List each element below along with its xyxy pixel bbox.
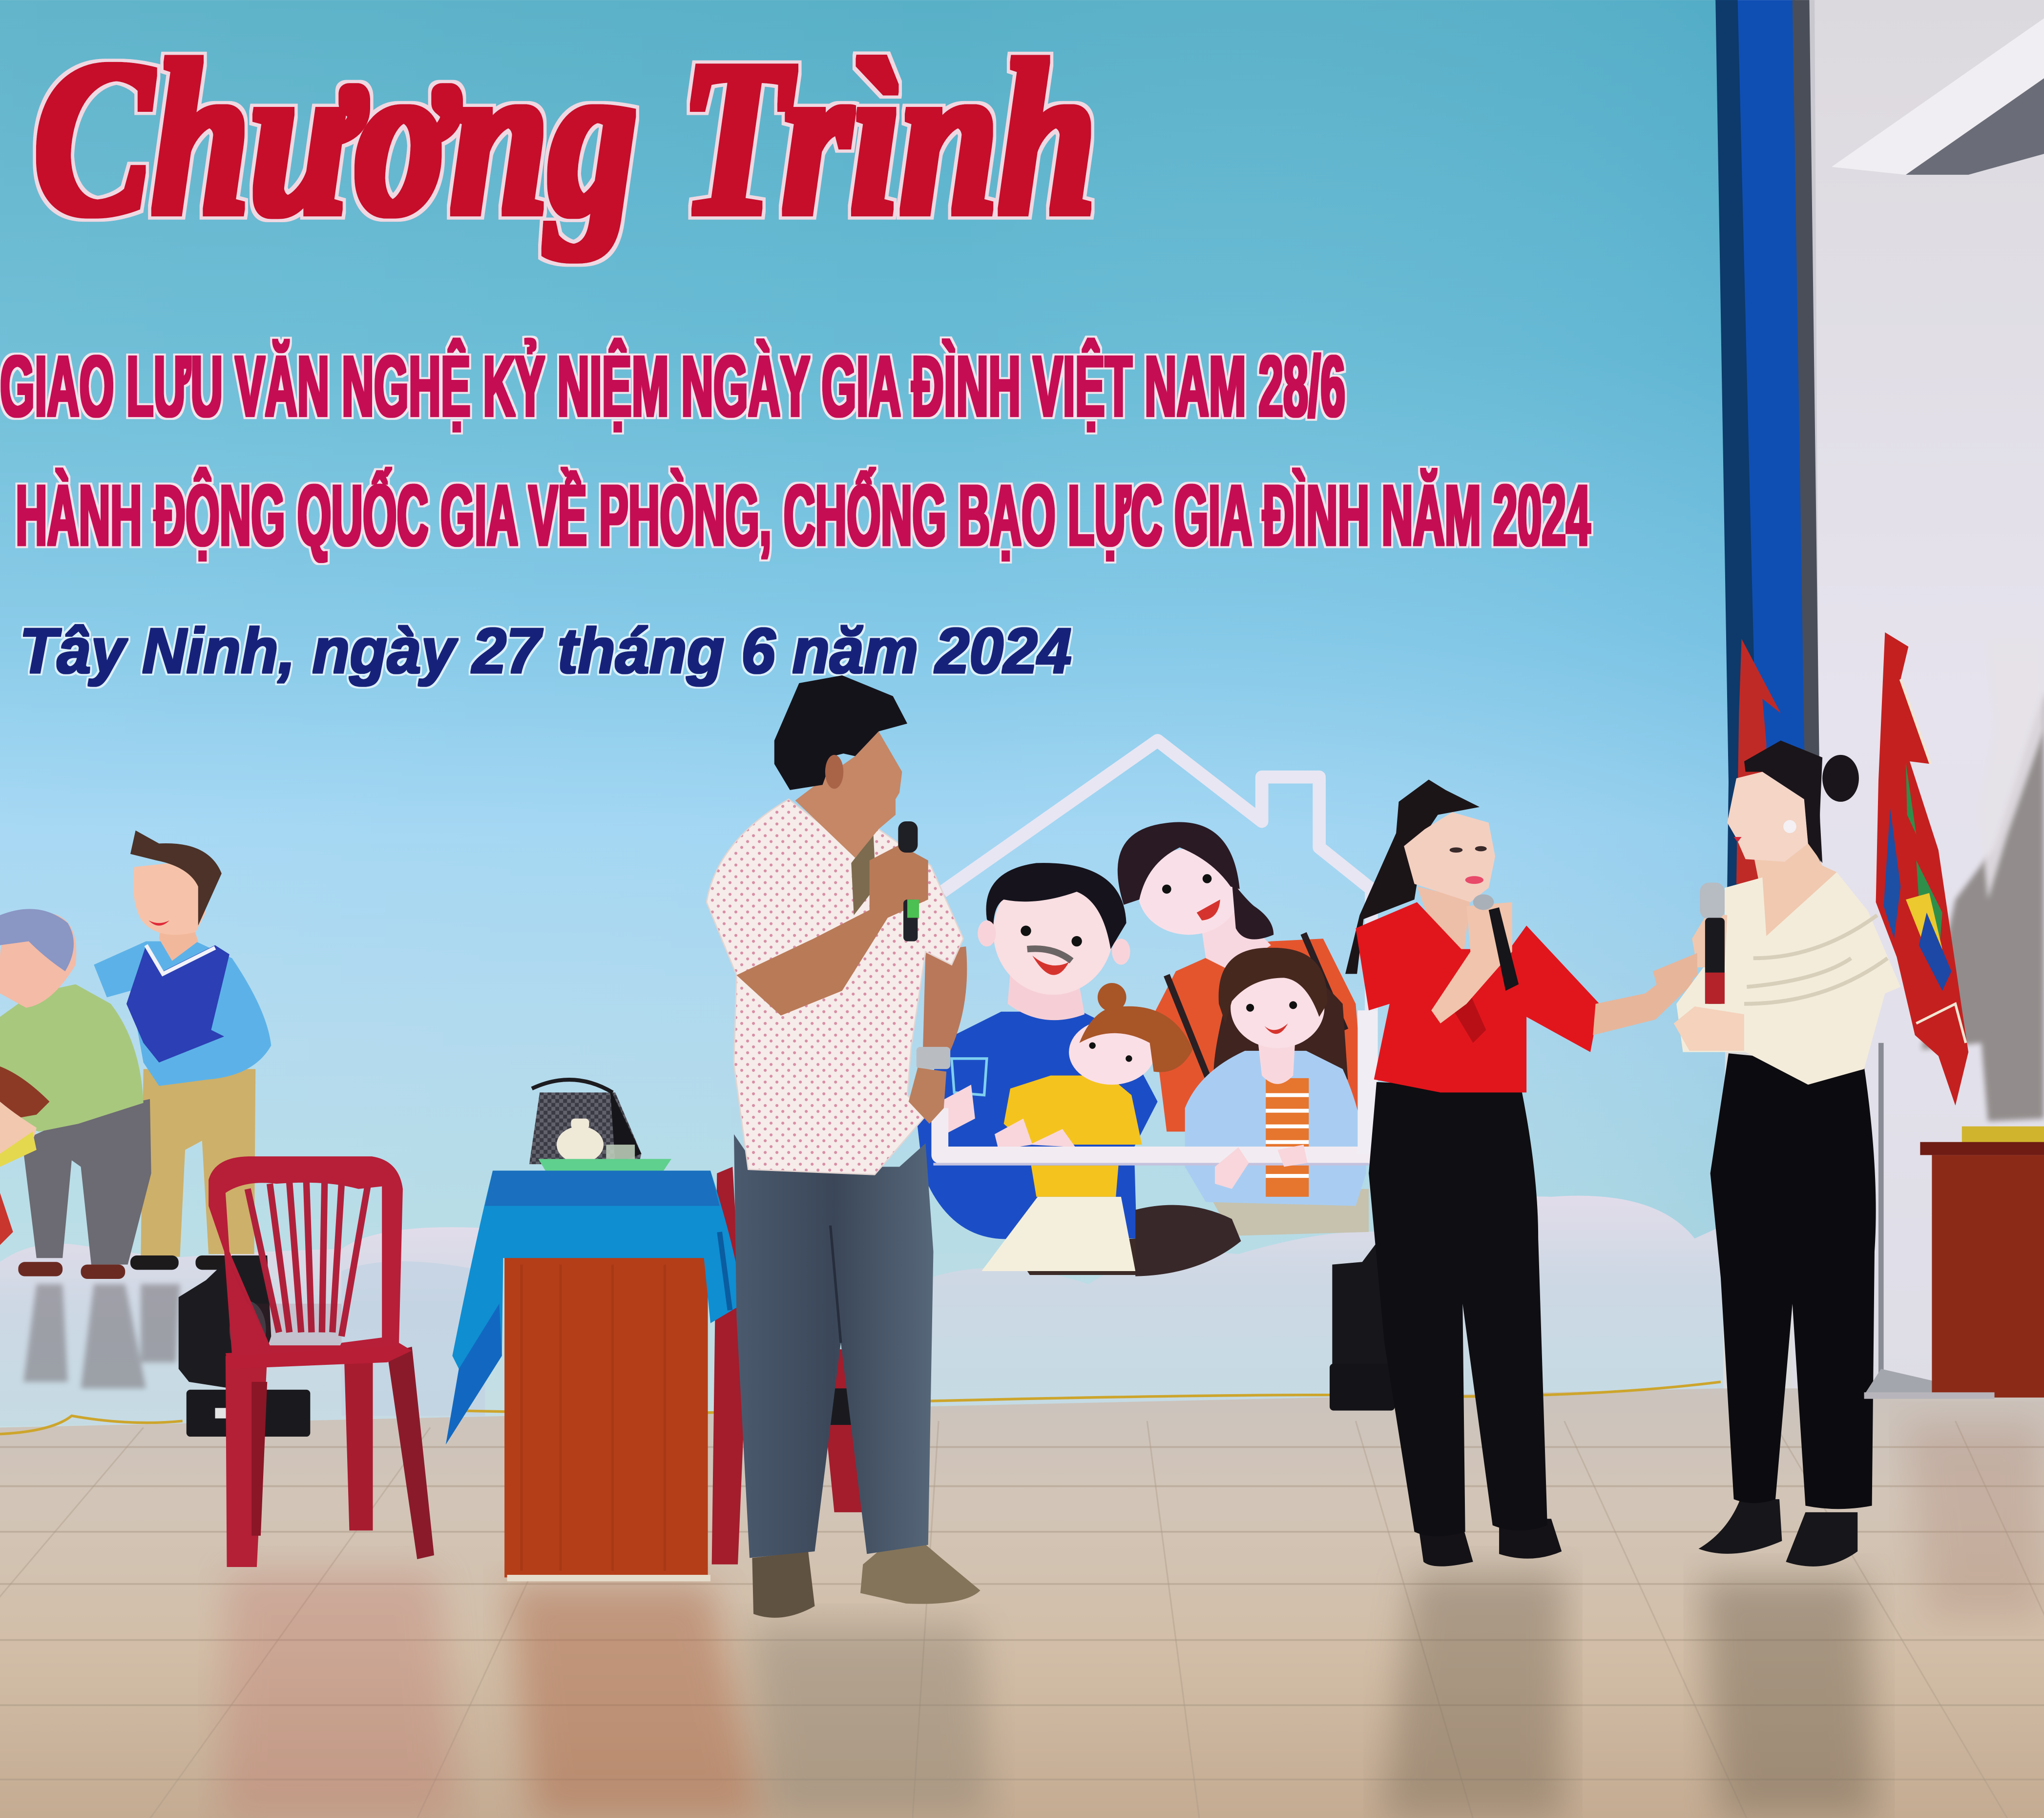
hair ponytail xyxy=(1345,780,1480,974)
trousers xyxy=(1369,1082,1547,1536)
face xyxy=(1727,772,1808,862)
yellow cable xyxy=(0,1382,1721,1434)
little girl xyxy=(981,983,1193,1271)
man hand at hip xyxy=(909,1068,946,1124)
red woman's mic xyxy=(1473,894,1519,991)
neck and chest xyxy=(1753,835,1837,939)
man jeans xyxy=(734,1134,933,1558)
title: Chương Trình xyxy=(34,16,1096,261)
flag left xyxy=(1736,639,1781,884)
cartoon reflection xyxy=(23,1284,180,1388)
clouds at backdrop base xyxy=(0,1196,1723,1426)
second red chair xyxy=(712,1167,867,1565)
white blouse xyxy=(1676,872,1900,1085)
tea set on tray xyxy=(539,1119,671,1178)
right wall xyxy=(1793,0,2044,1408)
blue tablecloth xyxy=(446,1170,743,1444)
man arm and hand xyxy=(736,845,928,1016)
picture frame bar xyxy=(940,1108,1371,1155)
hair xyxy=(1744,740,1822,863)
man hair xyxy=(774,675,907,790)
older child xyxy=(1185,948,1369,1236)
house outline xyxy=(942,740,1371,1147)
left cartoon family xyxy=(0,831,271,1388)
date line: Tây Ninh, ngày 27 tháng 6 năm 2024 xyxy=(20,615,1071,687)
black handbag xyxy=(529,1080,641,1164)
shoes xyxy=(1699,1499,1782,1554)
floor reflections xyxy=(222,1571,456,1818)
man back arm xyxy=(923,946,967,1051)
man shirt xyxy=(707,799,963,1174)
man undershirt tie xyxy=(851,835,876,915)
woman in white xyxy=(1653,639,1900,1567)
cartoon grandfather xyxy=(94,831,271,1270)
wooden side table xyxy=(1864,1127,2044,1399)
arm holding mic xyxy=(1431,902,1512,1024)
man neck and face xyxy=(795,731,902,858)
lower bodies xyxy=(1135,1205,1241,1276)
stage speaker left xyxy=(179,1255,310,1437)
man microphone xyxy=(898,821,919,941)
ceremonial flag right xyxy=(1864,632,1995,1395)
mother xyxy=(1118,822,1366,1131)
man xyxy=(707,675,980,1618)
red blouse xyxy=(1356,902,1600,1092)
stage speaker right xyxy=(1330,1236,1401,1411)
woman in red face xyxy=(1404,812,1495,902)
white woman's mic xyxy=(1700,882,1725,1004)
cartoon family in house xyxy=(915,740,1371,1276)
cartoon grandmother xyxy=(0,909,151,1279)
man shoes xyxy=(752,1551,815,1618)
father xyxy=(915,863,1158,1275)
neck xyxy=(1417,886,1470,952)
black trousers xyxy=(1710,1053,1876,1509)
outstretched arm xyxy=(1593,953,1697,1035)
shoes xyxy=(1418,1525,1473,1567)
woman in red xyxy=(1345,780,1697,1567)
wooden table xyxy=(504,1254,710,1581)
blue column xyxy=(1714,0,1821,899)
hands on frame xyxy=(1215,1145,1308,1189)
red plastic chair xyxy=(209,1156,434,1567)
floor xyxy=(0,1388,2044,1818)
stage backdrop xyxy=(0,0,1729,1427)
hands xyxy=(1674,1006,1744,1051)
